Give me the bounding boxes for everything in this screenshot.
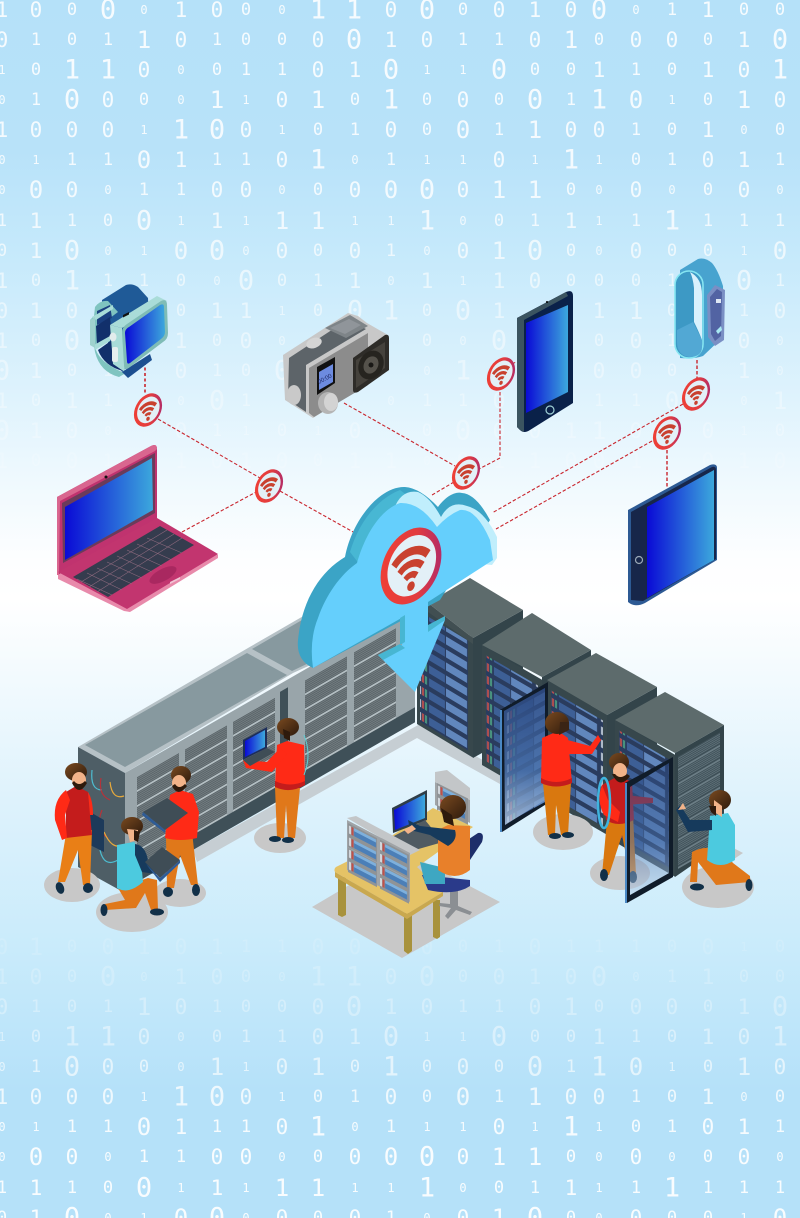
desk laptop: [392, 790, 443, 850]
binary digit pattern: top: 110011111: [0, 211, 785, 231]
binary digit pattern: top: 110: [140, 123, 748, 137]
server rack C: [547, 653, 657, 835]
binary digit pattern: bottom: 1: [740, 940, 748, 954]
binary digit pattern: top: 10: [173, 114, 225, 146]
person: technician behind door: [590, 753, 653, 890]
binary digit pattern: top: 010: [347, 296, 471, 326]
binary digit pattern: bottom: 111101: [177, 1181, 603, 1195]
person: technician with tablet at left rack end: [44, 763, 100, 902]
binary digit pattern: top: 1000: [212, 421, 785, 441]
wifi badge: tablet: [653, 412, 681, 454]
binary digit pattern: top: 11: [137, 26, 578, 54]
binary digit pattern: bottom: 0101111: [0, 1120, 603, 1134]
binary digit pattern: top: 1: [278, 304, 286, 318]
glass door: rack D: [625, 757, 673, 903]
binary digit pattern: top: 10001: [175, 148, 750, 172]
binary digit pattern: bottom: 0011: [29, 1143, 542, 1171]
binary digit pattern: bottom: 1011: [0, 1030, 467, 1044]
connection lines: [145, 360, 697, 533]
binary digit pattern: top: 0101100: [313, 120, 785, 140]
binary digit pattern: top: [0, 0, 788, 473]
binary digit pattern: top: 1000010: [31, 90, 713, 110]
binary digit pattern: top: 01: [665, 387, 787, 415]
binary digit pattern: top: 100000001: [0, 118, 714, 142]
binary digit pattern: top: 00001: [31, 331, 677, 351]
binary digit pattern: bottom: 01: [456, 1083, 542, 1111]
binary digit pattern: top: 000: [278, 334, 784, 348]
binary digit pattern: top: 11000: [139, 180, 713, 200]
office chair: [422, 833, 483, 919]
binary digit pattern: bottom: 0101: [64, 1052, 607, 1082]
binary digit pattern: top: 10101011011001010: [0, 449, 786, 473]
binary digit pattern: bottom: 11: [137, 993, 578, 1021]
wifi badge: watch: [134, 389, 162, 431]
binary digit pattern: bottom: 0110111100: [67, 937, 785, 957]
binary digit pattern: bottom: 000000: [0, 1150, 784, 1164]
binary digit pattern: bottom: 1101: [210, 1053, 751, 1081]
binary digit pattern: top: 11111011: [67, 150, 785, 170]
rack top surfaces: [78, 592, 410, 773]
binary digit pattern: top: 00: [346, 24, 788, 56]
desk top: [334, 808, 473, 914]
binary digit pattern: top: 11: [310, 144, 579, 176]
binary digit pattern: bottom: 100000001: [0, 1085, 714, 1109]
server rack D floor shadow: [700, 843, 743, 875]
wifi badge: camera: [452, 452, 480, 494]
server rack A: [417, 578, 523, 758]
binary digit pattern: bottom: 1000010: [31, 1057, 713, 1077]
binary digit pattern: bottom: 110: [140, 1090, 748, 1104]
binary digit pattern: top: 1011: [0, 63, 467, 77]
binary digit pattern: top: 01100: [67, 361, 677, 381]
binary digit pattern: top: 0000000: [66, 178, 750, 202]
cloud: back extrusion: [298, 487, 490, 668]
workstation: [312, 770, 500, 958]
back server stack: [435, 770, 470, 834]
binary digit pattern: bottom: 000100: [67, 967, 785, 987]
binary digit pattern: top: 0: [209, 386, 225, 416]
binary digit pattern: bottom: 00: [346, 992, 788, 1022]
binary digit pattern: top: 001: [0, 356, 471, 386]
camera display time: 00:00: [317, 373, 334, 386]
person: technician with laptop at rack: [243, 718, 308, 853]
binary digit pattern: top: 000100001: [0, 28, 750, 52]
binary digit pattern: top: 001: [213, 274, 467, 288]
binary digit pattern: top: 1: [629, 297, 643, 325]
icon: fitness band: [675, 258, 725, 358]
binary digit pattern: bottom: 0: [137, 1113, 151, 1141]
rack end with cables: [78, 747, 125, 893]
binary digit pattern: top: 00: [423, 364, 784, 378]
binary digit pattern: top: 1100000: [0, 329, 750, 353]
binary digit pattern: top: 0101: [64, 84, 607, 116]
binary digit pattern: bottom: 11000: [139, 1147, 713, 1167]
binary digit pattern: bottom: 0011: [0, 1060, 676, 1074]
binary digit pattern: top: 111101: [177, 214, 603, 228]
long server row: [78, 592, 415, 893]
binary digit pattern: top: 001000: [0, 241, 713, 261]
binary digit pattern: top: 11110: [0, 269, 541, 293]
binary digit pattern: top: 11: [275, 207, 325, 235]
desk legs: [338, 877, 440, 954]
wifi badge: phone: [487, 353, 515, 395]
rack front panels: [125, 606, 415, 889]
binary digit pattern: top: 111: [30, 209, 577, 233]
binary digit pattern: top: 0111: [104, 424, 748, 438]
binary digit pattern: top: 110: [0, 389, 505, 413]
binary digit pattern: top: 1011001100: [31, 30, 713, 50]
cloud: light rim: [393, 492, 497, 565]
binary digit pattern: top: 100: [64, 266, 752, 296]
binary digit pattern: bottom: 10: [173, 1082, 225, 1112]
binary digit pattern: bottom: 110011111: [0, 1178, 785, 1198]
binary digit pattern: bottom: 011: [136, 1172, 680, 1204]
binary digit pattern: top: 0: [419, 174, 435, 206]
binary digit pattern: bottom: 00110010: [31, 1027, 677, 1047]
binary digit pattern: top: 0011: [29, 176, 542, 204]
server rack B: [482, 613, 591, 800]
binary digit pattern: top: 0000: [102, 88, 786, 112]
person: technician at rack C: [533, 712, 601, 850]
binary digit pattern: bottom: 001110: [138, 1025, 750, 1049]
server rack D: [615, 692, 724, 877]
binary digit pattern: bottom: 0000000: [66, 1145, 750, 1169]
glass door: rack B: [500, 682, 548, 832]
binary digit pattern: bottom: 11001: [64, 1022, 788, 1052]
binary digit pattern: top: 00: [0, 416, 471, 446]
binary digit pattern: top: 010001: [104, 244, 748, 258]
person at workstation: [404, 795, 470, 884]
binary digit pattern: top: 000000: [0, 183, 784, 197]
binary digit pattern: top: 01011110: [0, 299, 786, 323]
binary digit pattern: bottom: 11: [275, 1174, 325, 1202]
binary digit pattern: top: 001110: [138, 58, 750, 82]
binary digit pattern: top: 010: [174, 237, 787, 265]
front server stack: [347, 816, 420, 904]
binary digit pattern: bottom: 0101100: [313, 1087, 785, 1107]
binary digit pattern: bottom: 000: [140, 970, 640, 984]
binary digit pattern: bottom: 0000: [102, 1055, 786, 1079]
wifi badge: laptop: [255, 465, 283, 507]
binary digit pattern: top: 000100: [67, 0, 785, 20]
binary digit pattern: top: 00110010: [31, 60, 677, 80]
binary digit pattern: top: 011: [136, 206, 680, 236]
binary digit pattern: bottom: 1011001100: [31, 997, 713, 1017]
arrow shading: [378, 615, 445, 660]
binary digit pattern: top: 11001: [64, 54, 788, 86]
icon: smartwatch: [90, 284, 168, 378]
icon: action camera: [283, 313, 389, 418]
cloud wifi badge: [381, 518, 441, 614]
binary digit pattern: bottom: 0010100000: [0, 935, 714, 959]
binary digit pattern: bottom: [0, 933, 788, 1218]
person: kneeling technician with server: [96, 817, 180, 932]
binary digit pattern: bottom: 000100001: [0, 995, 750, 1019]
icon: smartphone: [517, 291, 573, 432]
cloud: front face: [312, 503, 493, 692]
wifi badge: band: [682, 373, 710, 415]
binary digit pattern: bottom: 1: [29, 933, 43, 961]
binary digit pattern: bottom: 101000101: [0, 965, 714, 989]
cloud with download arrow: [298, 487, 497, 692]
binary digit pattern: top: 100000100: [30, 419, 714, 443]
person: technician carrying server: [142, 766, 206, 907]
binary digit pattern: top: 00: [64, 326, 507, 356]
binary digit pattern: top: 10000: [30, 239, 642, 263]
binary digit pattern: top: 0: [423, 454, 431, 468]
binary digit pattern: top: 10001: [30, 359, 750, 383]
icon: laptop: [57, 445, 218, 612]
binary digit pattern: top: 0: [137, 146, 151, 174]
workstation floor: [312, 852, 500, 958]
binary digit pattern: bottom: 0: [419, 1142, 435, 1172]
binary digit pattern: top: 010: [31, 451, 323, 471]
binary digit pattern: bottom: 01100: [100, 962, 607, 992]
binary digit pattern: bottom: 111: [30, 1176, 577, 1200]
icon: tablet: [628, 464, 717, 605]
binary digit pattern: bottom: 11111011: [67, 1117, 785, 1137]
binary digit pattern: top: 000: [140, 3, 640, 17]
binary digit pattern: top: 00001: [176, 301, 749, 321]
binary digit pattern: top: 01: [456, 116, 542, 144]
binary digit pattern: top: 000: [64, 236, 543, 266]
binary digit pattern: bottom: 11: [310, 1112, 579, 1142]
binary digit pattern: top: 1101: [210, 86, 751, 114]
binary digit pattern: top: 01100100011: [31, 271, 785, 291]
binary digit pattern: bottom: 10001: [175, 1115, 750, 1139]
binary digit pattern: top: 0101111: [0, 153, 603, 167]
binary digit pattern: top: 1: [592, 417, 606, 445]
floor strip: [193, 724, 500, 862]
person: kneeling technician at rack D: [676, 790, 754, 908]
binary digit pattern: top: 000: [177, 394, 748, 408]
binary digit pattern: top: 0111111: [31, 391, 641, 411]
wifi badges: [134, 353, 710, 507]
binary digit pattern: top: 0011: [0, 93, 676, 107]
